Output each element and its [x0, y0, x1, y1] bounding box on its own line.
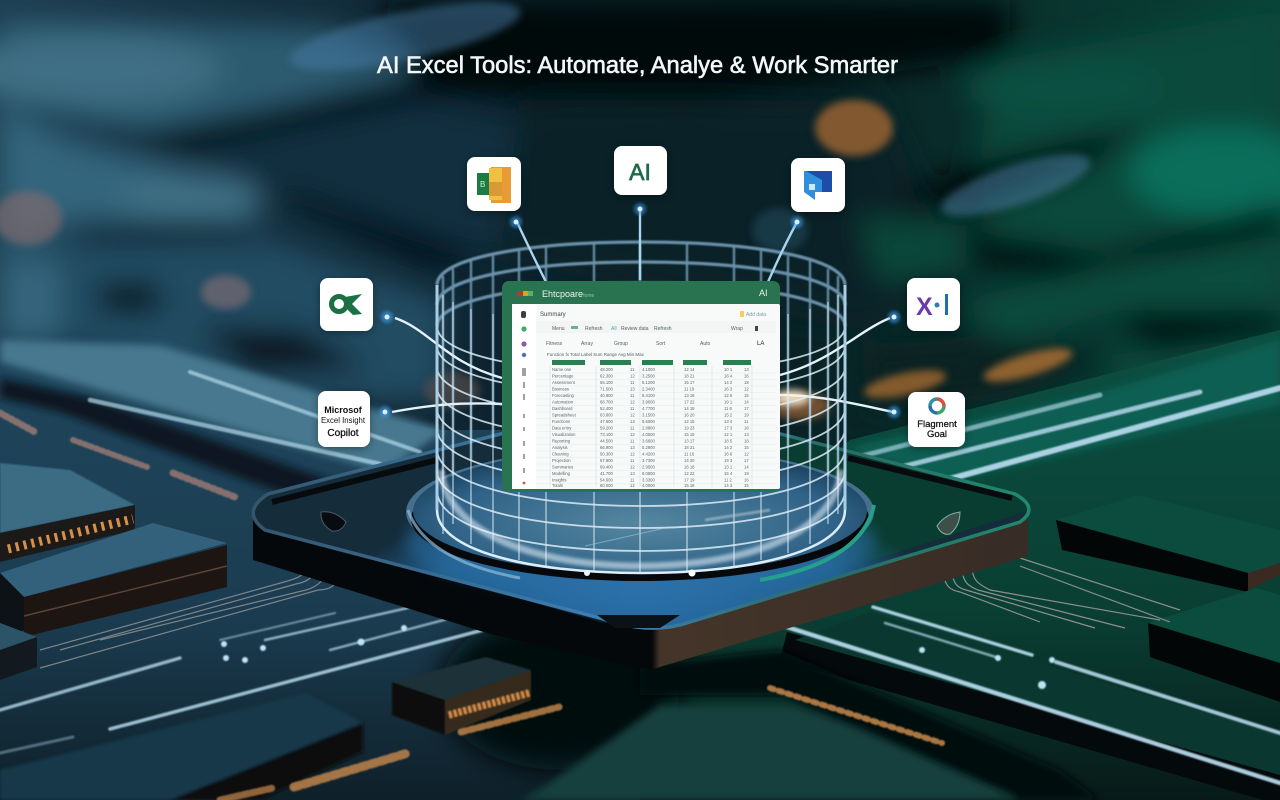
data table: 14	[744, 464, 749, 470]
data table: 18 21	[684, 374, 695, 378]
chip: right upper	[1056, 495, 1280, 592]
data table: 12	[744, 452, 749, 456]
mounting notches	[321, 512, 346, 531]
data table: 16 3	[724, 386, 733, 392]
icon: colored ring	[930, 399, 944, 413]
tile: AI	[614, 146, 667, 195]
data table: 71.500	[600, 386, 613, 392]
data table: 3.7300	[642, 458, 655, 463]
central platform	[253, 398, 1030, 670]
data table: 63.800	[600, 412, 613, 418]
data table: 11	[630, 438, 635, 444]
chip: right middle	[1148, 588, 1280, 702]
data table: 18	[744, 438, 749, 444]
data table: 11 16	[684, 452, 695, 456]
data table: 52.400	[600, 406, 613, 411]
data table: 62.300	[600, 374, 613, 378]
data table: 5.6000	[642, 419, 655, 424]
data table: 73.100	[600, 432, 613, 437]
data table: 13	[630, 471, 635, 476]
data table: 66.900	[600, 445, 613, 450]
toolbar: Group	[614, 341, 628, 347]
data table: 59.200	[600, 426, 613, 430]
data table: 15	[744, 483, 749, 488]
data table: 47.600	[600, 419, 613, 424]
window title bar	[517, 288, 768, 299]
data table: 15 2	[724, 412, 733, 418]
holographic cylinder front	[437, 285, 845, 576]
chip: bottom centre	[392, 657, 531, 735]
window title bar: Home	[581, 293, 595, 299]
data table: 2.9500	[642, 464, 655, 470]
data table: 14 20	[684, 458, 695, 463]
title: AI Excel Tools: Automate, Analye & Work Smarter	[377, 52, 898, 79]
data table: Spreadsheet	[552, 412, 577, 418]
data table: Modelling	[552, 471, 571, 476]
data table: 18 4	[724, 374, 733, 378]
data table: Business	[552, 386, 569, 392]
data table: 13	[630, 419, 635, 424]
tile: X-I logo: X	[916, 293, 933, 321]
data table: 6.4100	[642, 393, 655, 398]
data table: Insights	[552, 478, 566, 482]
chip: lower right band	[780, 612, 1280, 800]
toolbar: Add data	[746, 312, 766, 318]
bokeh lights	[0, 0, 1096, 420]
data table: 11	[630, 406, 635, 411]
data table: 3.2500	[642, 374, 655, 378]
data table: 11	[630, 478, 635, 482]
platform top surface	[253, 398, 1029, 628]
data table: 17 22	[684, 400, 695, 404]
data table: Cleaning	[552, 452, 569, 456]
connector: top left	[510, 216, 546, 282]
window content panel	[512, 304, 780, 489]
toolbar: Auto	[700, 341, 711, 347]
data table: Data entry	[552, 426, 572, 430]
tile: Microsoft Excel Copilot	[318, 391, 370, 447]
data table: 19 23	[684, 426, 695, 430]
connector: top centre	[634, 203, 646, 280]
platform rim	[253, 398, 1029, 628]
toolbar: Function fx Total Label Sum Range Avg Min Max	[547, 352, 645, 357]
data table: 4.7700	[642, 406, 655, 411]
data table: 4.0000	[642, 483, 655, 488]
data table: Assessment	[552, 380, 576, 385]
data table: 12	[630, 400, 635, 404]
connector: left lower	[379, 403, 502, 418]
data table: 15 4	[724, 471, 733, 476]
data table: 68.700	[600, 400, 613, 404]
data table: 12 5	[724, 393, 733, 398]
data table: 12 22	[684, 471, 695, 476]
data table: 14	[744, 400, 749, 404]
icon: blue document	[804, 171, 832, 200]
toolbar: Wrap	[731, 326, 743, 332]
toolbar	[536, 311, 776, 357]
data table: 3.9000	[642, 400, 655, 404]
data table: 11 6	[724, 406, 733, 411]
chip: middle left	[0, 523, 227, 640]
circuit board foreground	[0, 330, 1280, 800]
tile: X-I logo	[907, 278, 960, 331]
data table: 3.3300	[642, 478, 655, 482]
data table: 12 1	[724, 432, 733, 437]
data table: 11	[744, 419, 749, 424]
data table: 19 1	[724, 400, 733, 404]
chip: bottom right blurred slab	[520, 650, 1100, 800]
data table: 6.0800	[642, 471, 655, 476]
data table: Reporting	[552, 438, 571, 444]
data table: 10 1	[724, 367, 733, 372]
data table: 11	[630, 380, 635, 385]
spreadsheet window	[502, 281, 780, 492]
toolbar: Array	[581, 341, 593, 347]
data table: 11	[630, 426, 635, 430]
chip: bottom left	[0, 693, 363, 800]
data table: 11	[630, 367, 635, 372]
data table: 55.100	[600, 380, 613, 385]
wire pins left	[40, 562, 342, 668]
data table: 14 2	[724, 380, 733, 385]
data table: 13 16	[684, 393, 695, 398]
table header cells	[552, 360, 751, 365]
data table: 48.200	[600, 367, 613, 372]
icon: stacked sheets: B	[480, 180, 485, 189]
data table: Percentage	[552, 374, 574, 378]
data table: 69.400	[600, 464, 613, 470]
data table: 14 2	[724, 445, 733, 450]
connector: right lower	[774, 390, 900, 418]
data table: 12	[630, 464, 635, 470]
data table: 41.700	[600, 471, 613, 476]
tile: Microsoft Excel Copilot: Copilot	[327, 428, 359, 439]
data table: 14 3	[724, 483, 733, 488]
toolbar: Refresh	[585, 326, 603, 332]
data table: Summaries	[552, 464, 573, 470]
data table: 57.800	[600, 458, 613, 463]
data table: 17	[744, 458, 749, 463]
connector: left upper	[381, 311, 502, 378]
data table: Dashboard	[552, 406, 573, 411]
data table: 17	[744, 406, 749, 411]
data table: 18 5	[724, 438, 733, 444]
glowing traces	[0, 372, 1280, 783]
platform side wall	[253, 510, 1028, 670]
data table: 40.900	[600, 393, 613, 398]
data table: 4.4200	[642, 452, 655, 456]
data table: 11 2	[724, 478, 733, 482]
data table: 19 3	[724, 458, 733, 463]
data table: 15	[744, 445, 749, 450]
tile: Flagment Goal: Goal	[927, 429, 947, 440]
toolbar: Sort	[656, 341, 666, 347]
data table: 4.0500	[642, 432, 655, 437]
data table: 50.300	[600, 452, 613, 456]
data table: Functions	[552, 419, 570, 424]
data table: 16	[744, 426, 749, 430]
data table: 12	[630, 412, 635, 418]
toolbar: LA	[757, 341, 764, 347]
data table: 19	[744, 471, 749, 476]
data table: 16 6	[724, 452, 733, 456]
data table: 18	[744, 380, 749, 385]
data table: 13	[744, 432, 749, 437]
data table: 16 18	[684, 464, 695, 470]
data table: 11 19	[684, 386, 695, 392]
tile: Flagment Goal: Flagment	[917, 419, 957, 430]
data table: Automation	[552, 400, 574, 404]
orange contact pads	[0, 413, 942, 800]
tile: spreadsheet app icon	[467, 157, 521, 211]
data table: 13 17	[684, 438, 695, 444]
data table: 12	[744, 386, 749, 392]
toolbar: Menu	[552, 326, 565, 332]
data table: 12 14	[684, 367, 695, 372]
icon: green eye and cross	[332, 294, 362, 315]
connector: top right	[768, 216, 803, 282]
data table: 14 18	[684, 406, 695, 411]
data table: 17 19	[684, 478, 695, 482]
tile: blue document icon	[791, 158, 845, 212]
data table: 5.1200	[642, 380, 655, 385]
data table: 15	[744, 393, 749, 398]
data table: 16	[744, 374, 749, 378]
data table: 16	[744, 478, 749, 482]
data table: Visualization	[552, 432, 576, 437]
glowing ring base	[405, 446, 875, 596]
sidebar icons	[512, 304, 536, 489]
holographic cylinder back	[437, 242, 845, 486]
data table: 4.1000	[642, 367, 655, 372]
data table: 3.1500	[642, 412, 655, 418]
data table: 44.500	[600, 438, 613, 444]
toolbar: Refresh	[654, 326, 672, 332]
data table: 60.000	[600, 483, 613, 488]
data table: 12	[630, 483, 635, 488]
data table: Name one	[552, 367, 572, 372]
data table: 13	[630, 386, 635, 392]
data table: 16 20	[684, 412, 695, 418]
data table: 13	[630, 445, 635, 450]
tile: Microsoft Excel Copilot: Excel Insight	[321, 415, 366, 425]
connector: right upper	[780, 311, 900, 375]
data table: 5.2900	[642, 445, 655, 450]
tile: green logo	[320, 278, 373, 331]
toolbar: Summary	[540, 312, 566, 318]
rim groove	[272, 458, 1012, 502]
tile: AI: AI	[629, 159, 651, 185]
data table: 12	[630, 452, 635, 456]
data table: Forecasting	[552, 393, 575, 398]
data table: 12 15	[684, 419, 695, 424]
data table: 15 19	[684, 432, 695, 437]
data table: 15 17	[684, 380, 695, 385]
data table: 15 18	[684, 483, 695, 488]
data table: Analysis	[552, 445, 568, 450]
data table: Projection	[552, 458, 571, 463]
data table: 54.600	[600, 478, 613, 482]
window title bar: Ehtcpoare	[542, 289, 583, 299]
tile: Microsoft Excel Copilot: Microsof	[324, 405, 363, 415]
wire pins right	[944, 558, 1180, 628]
data table: 13 4	[724, 419, 733, 424]
data table: 3.6600	[642, 438, 655, 444]
data table: 12	[630, 432, 635, 437]
data table: 17 3	[724, 426, 733, 430]
data table: 18 21	[684, 445, 695, 450]
tile: Flagment Goal	[908, 392, 965, 447]
data table: 12	[630, 374, 635, 378]
data table: 13	[744, 367, 749, 372]
chip: lower left	[0, 623, 37, 680]
data table: 19	[744, 412, 749, 418]
data table: 2.3400	[642, 386, 655, 392]
data table	[536, 366, 776, 488]
chip: upper left	[0, 463, 135, 562]
data table: 11	[630, 393, 635, 398]
toolbar: Fitness	[546, 341, 563, 347]
toolbar: All	[611, 326, 617, 332]
data table: Totals	[552, 483, 563, 488]
data table: 13 1	[724, 464, 733, 470]
window title bar: AI	[759, 288, 768, 298]
data table: 11	[630, 458, 635, 463]
toolbar: Review data	[621, 326, 649, 332]
data table: 2.8800	[642, 426, 655, 430]
